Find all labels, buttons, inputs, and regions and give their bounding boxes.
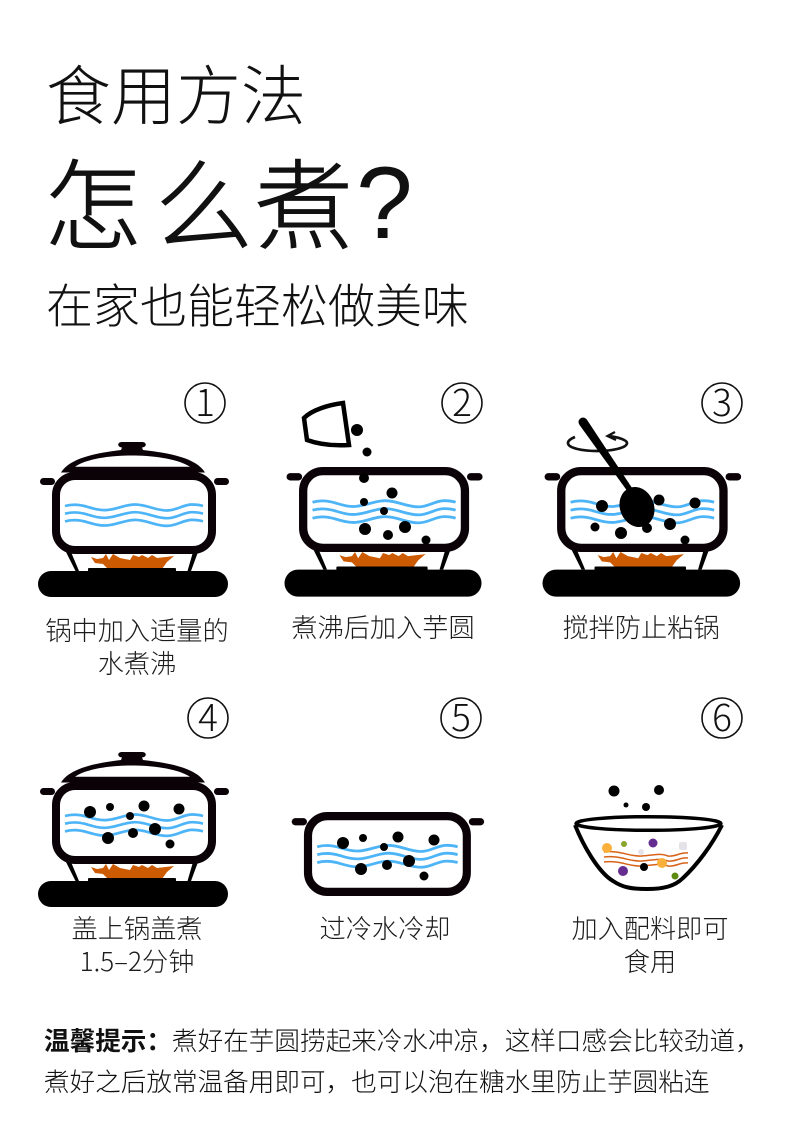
number 1: 1 [195, 373, 215, 427]
main heading: 怎么煮 [44, 128, 353, 270]
tip text: 煮好之后放常温备用即可，也可以泡在糖水里防止芋圆粘连 [44, 1062, 709, 1099]
number 1 [185, 373, 225, 427]
number 3: 3 [712, 373, 732, 427]
step 1 [38, 373, 229, 681]
number 5 [441, 688, 481, 742]
icon: pot of cold water [292, 816, 484, 892]
step 4 [38, 688, 229, 979]
label 2: 煮沸后加入芋圆 [291, 607, 475, 645]
number 2 [442, 373, 482, 427]
label 5: 过冷水冷却 [320, 908, 450, 946]
icon: pot with lid boiling water [38, 442, 229, 597]
icon: pot without lid [285, 471, 483, 597]
number 2: 2 [452, 373, 472, 427]
label 6: 食用 [624, 941, 676, 979]
tip text: 煮好在芋圆捞起来冷水冲凉，这样口感会比较劲道， [172, 1021, 761, 1058]
number 4 [188, 688, 228, 742]
icon: pot being stirred [543, 471, 741, 597]
step 6 [571, 688, 742, 979]
icon: cup pouring taro balls [304, 403, 430, 544]
step 2 [285, 373, 483, 645]
icon: bowl with toppings [575, 785, 722, 889]
number 6: 6 [712, 688, 732, 742]
label 4: 1.5–2分钟 [80, 941, 194, 979]
title: 食用方法 [46, 44, 306, 138]
label 1: 锅中加入适量的 [45, 610, 229, 648]
label 4 [72, 908, 202, 979]
icon: spoon and taro balls [568, 418, 700, 544]
step 5 [292, 688, 484, 946]
number 5: 5 [451, 688, 471, 742]
subtitle: 在家也能轻松做美味 [46, 268, 469, 337]
label 4: 盖上锅盖煮 [72, 908, 202, 946]
label 3: 搅拌防止粘锅 [562, 607, 720, 645]
label 1 [45, 610, 229, 681]
tip text [44, 1021, 761, 1099]
main heading: ? [356, 146, 413, 260]
number 4: 4 [198, 688, 218, 742]
label 1: 水煮沸 [98, 643, 176, 681]
number 3 [702, 373, 742, 427]
label 6: 加入配料即可 [571, 908, 729, 946]
tip text: 温馨提示： [44, 1021, 172, 1058]
label 6 [571, 908, 729, 979]
number 6 [702, 688, 742, 742]
icon: covered pot with taro balls [38, 752, 229, 907]
step 3 [543, 373, 742, 645]
